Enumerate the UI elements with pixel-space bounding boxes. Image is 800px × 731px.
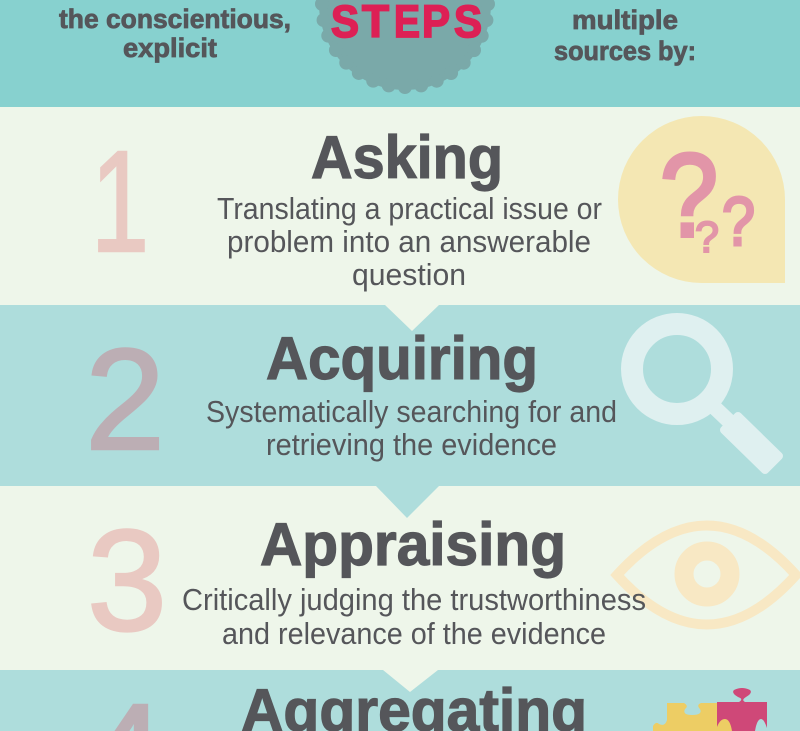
text: acquiring description: Systematically searching for and [206,394,617,429]
header text left: the conscientious, [59,4,291,34]
icon: eye [617,526,796,624]
arrow: step 2 to 3 [376,486,439,518]
badge [319,0,491,90]
panel: step 1 asking [0,107,800,305]
icon: question speech bubble: ? [660,130,718,262]
icon: question speech bubble: ? [722,183,755,260]
number 3: 3 [87,500,167,661]
header text left: explicit [123,33,217,63]
header text right: sources by: [554,36,696,66]
header text left [59,4,291,63]
text: asking description: problem into an answerable [227,224,591,259]
text: appraising description: and relevance of the evidence [222,616,606,651]
panel: step 2 acquiring [0,305,800,486]
badge word: STEPS [331,0,482,47]
arrow: step 1 to 2 [385,305,439,331]
arrow: step 3 to 4 [383,670,438,692]
header text right [554,5,696,66]
number 1: 1 [91,121,149,282]
text: asking description: Translating a practical issue or [217,191,602,226]
icon: puzzle pieces [653,688,767,731]
text: asking description [217,191,602,292]
heading: Appraising: Appraising [260,511,566,578]
panel: step 3 appraising [0,486,800,670]
header text right: multiple [572,5,678,35]
text: acquiring description [206,394,617,462]
heading: Asking: Asking [311,124,503,191]
panel: step 4 aggregating [0,670,800,731]
text: appraising description: Critically judging the trustworthiness [182,582,646,617]
text: asking description: question [352,257,466,292]
text: acquiring description: retrieving the evidence [266,427,557,462]
icon: question speech bubble [618,116,785,283]
icon: question speech bubble: ? [695,213,719,262]
text: appraising description [182,582,646,651]
heading: Acquiring: Acquiring [266,325,538,392]
number 2: 2 [85,319,165,480]
icon: magnifying glass [632,324,779,470]
panel: header [0,0,800,107]
